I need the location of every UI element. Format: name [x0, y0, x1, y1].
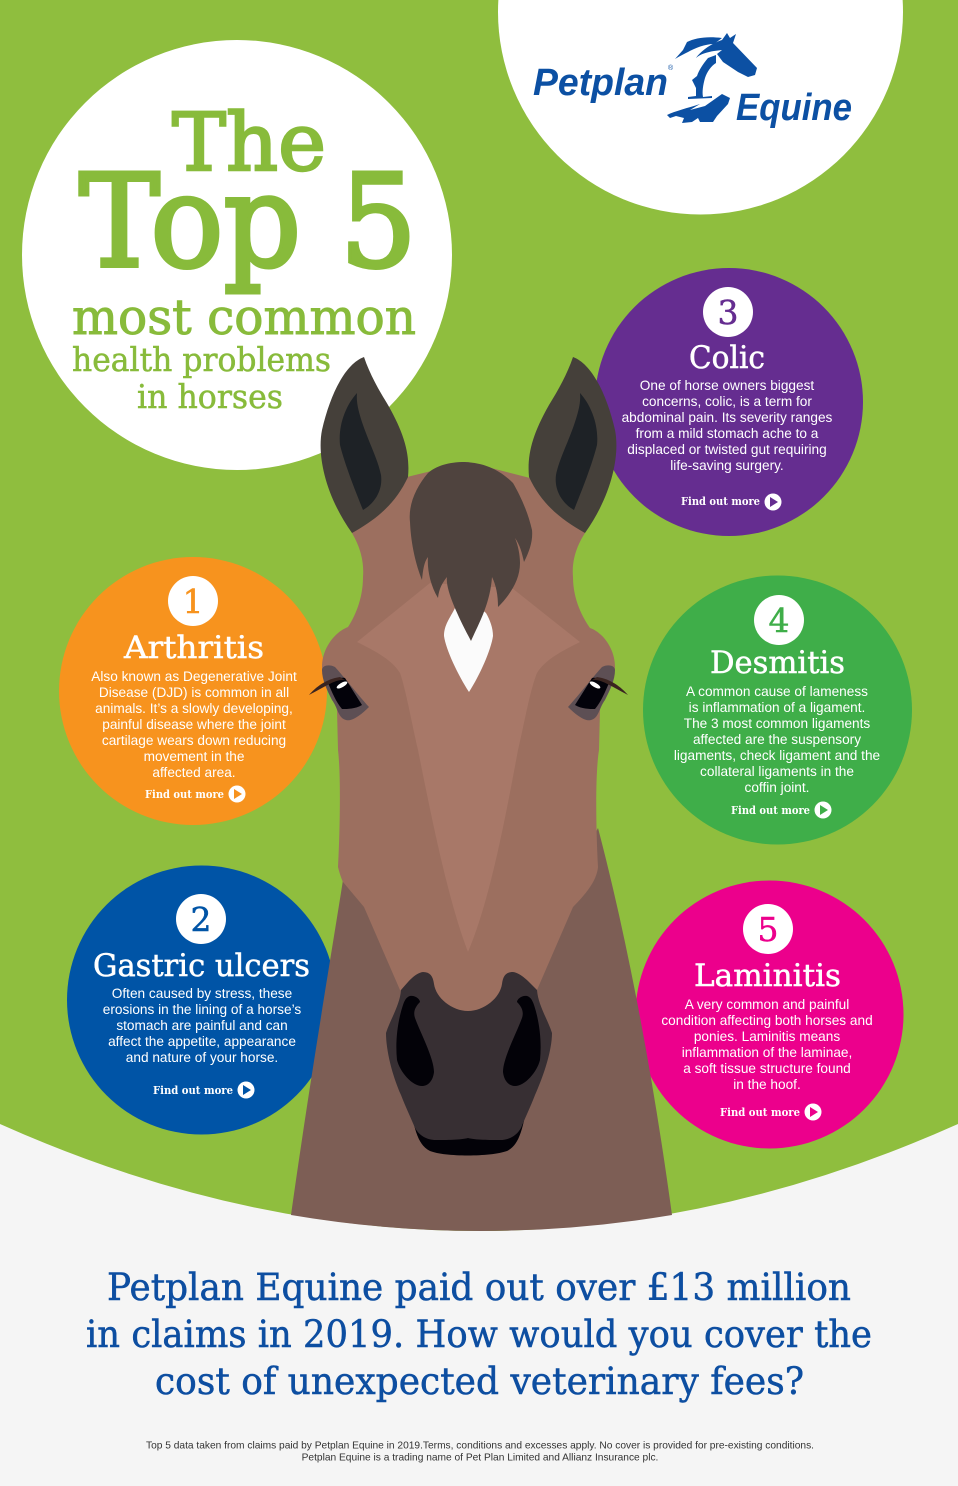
link: find out more: Find out more: [153, 1084, 233, 1097]
heading: Laminitis: Laminitis: [694, 958, 841, 994]
text: Laminitis description: a soft tissue structure found: [683, 1061, 851, 1076]
number badge 2: [176, 894, 226, 944]
text: Arthritis description: Also known as Degenerative Joint: [91, 669, 297, 684]
text: Gastric ulcers description: [103, 986, 301, 1065]
text: Laminitis description: A very common and painful: [685, 997, 849, 1012]
illustration: horse: [291, 357, 672, 1231]
right nostril: [503, 996, 541, 1086]
text: Desmitis description: affected are the suspensory: [693, 732, 861, 747]
text: Colic description: abdominal pain. Its severity ranges: [622, 410, 833, 425]
panel: 4 Desmitis: [643, 576, 912, 844]
text: Gastric ulcers description: Often caused by stress, these: [112, 986, 292, 1001]
link: find out more: [145, 786, 246, 802]
text: Desmitis description: collateral ligaments in the: [700, 764, 854, 779]
right eye: [568, 665, 628, 720]
number badge 5: [743, 904, 793, 954]
panel: title circle: [22, 40, 452, 470]
number badge 3: 3: [718, 293, 738, 332]
heading: Desmitis: Desmitis: [710, 645, 845, 681]
logo: Petplan Equine: [533, 33, 852, 129]
link: find out more: [731, 802, 832, 818]
text: Desmitis description: The 3 most common ligaments: [684, 716, 870, 731]
logo: Petplan Equine: Petplan: [533, 62, 668, 104]
text: Arthritis description: cartilage wears down reducing: [102, 733, 286, 748]
horse neck and chest: [291, 828, 672, 1231]
heading: Arthritis: Arthritis: [123, 630, 264, 666]
heading: Gastric ulcers: Gastric ulcers: [93, 948, 310, 984]
text: Arthritis description: animals. It’s a slowly developing,: [95, 701, 293, 716]
panel: 5 Laminitis: [636, 880, 904, 1148]
heading: The Top 5 most common health problems in horses: Top 5: [79, 148, 417, 297]
mouth: [412, 1116, 525, 1156]
link: find out more: Find out more: [145, 788, 224, 801]
text: Laminitis description: condition affecting both horses and: [661, 1013, 873, 1028]
link: find out more: [720, 1104, 822, 1120]
logo: Petplan Equine: ®: [668, 64, 674, 72]
text: Desmitis description: [674, 684, 880, 795]
text: Colic description: displaced or twisted gut requiring: [627, 442, 827, 457]
text: Desmitis description: ligaments, check ligament and the: [674, 748, 880, 763]
panel: 3 Colic: [595, 268, 863, 536]
number badge 3: [703, 287, 753, 337]
closing statement: Petplan Equine paid out over £13 million: [107, 1266, 851, 1309]
footnote: [146, 1440, 814, 1464]
muzzle: [386, 972, 552, 1140]
right ear: [529, 357, 616, 533]
footnote: Petplan Equine is a trading name of Pet Plan Limited and Allianz Insurance plc.: [302, 1452, 658, 1464]
heading: The Top 5 most common health problems in horses: [72, 96, 417, 416]
text: Colic description: from a mild stomach ache to a: [636, 426, 819, 441]
footnote: Top 5 data taken from claims paid by Petplan Equine in 2019.Terms, conditions and excesses apply. No cover is provided for pre-existing conditions.: [146, 1440, 814, 1452]
text: Desmitis description: A common cause of lameness: [686, 684, 868, 699]
link: find out more: [681, 494, 782, 510]
text: Laminitis description: in the hoof.: [733, 1077, 801, 1092]
text: Laminitis description: ponies. Laminitis means: [694, 1029, 840, 1044]
heading: The Top 5 most common health problems in horses: The: [172, 96, 326, 189]
heading: Colic: Colic: [689, 340, 765, 376]
number badge 2: 2: [190, 900, 212, 939]
closing statement: in claims in 2019. How would you cover the: [86, 1313, 872, 1356]
text: Colic description: One of horse owners biggest: [640, 378, 814, 393]
number badge 4: [754, 595, 804, 645]
link: find out more: Find out more: [720, 1106, 800, 1119]
number badge 5: 5: [758, 910, 778, 949]
left eye: [309, 665, 369, 720]
text: Gastric ulcers description: affect the appetite, appearance: [108, 1034, 296, 1049]
text: Gastric ulcers description: stomach are painful and can: [116, 1018, 288, 1033]
panel: 1 Arthritis: [59, 557, 327, 825]
text: Arthritis description: Disease (DJD) is common in all: [99, 685, 289, 700]
text: Arthritis description: [91, 669, 297, 780]
closing statement: cost of unexpected veterinary fees?: [155, 1360, 804, 1403]
heading: The Top 5 most common health problems in horses: in horses: [137, 377, 283, 416]
text: Desmitis description: coffin joint.: [745, 780, 809, 795]
number badge 1: 1: [182, 582, 204, 621]
text: Colic description: [622, 378, 833, 473]
text: Arthritis description: movement in the: [144, 749, 244, 764]
left ear: [321, 357, 408, 533]
number badge 1: [168, 576, 218, 626]
horse face highlight: [357, 583, 580, 952]
text: Colic description: concerns, colic, is a term for: [642, 394, 812, 409]
text: Arthritis description: painful disease where the joint: [102, 717, 286, 732]
text: Laminitis description: inflammation of the laminae,: [682, 1045, 852, 1060]
panel: logo circle: [498, 0, 903, 214]
left nostril: [396, 996, 434, 1086]
link: find out more: [153, 1082, 254, 1098]
link: find out more: Find out more: [731, 804, 810, 817]
text: Desmitis description: is inflammation of a ligament.: [689, 700, 865, 715]
horse head: [322, 462, 615, 1020]
panel: 2 Gastric ulcers: [67, 866, 336, 1134]
logo: Petplan Equine: Equine: [736, 87, 852, 129]
closing statement: [86, 1266, 872, 1403]
link: find out more: Find out more: [681, 495, 760, 508]
text: Gastric ulcers description: erosions in the lining of a horse’s: [103, 1002, 301, 1017]
text: Laminitis description: [661, 997, 873, 1092]
text: Arthritis description: affected area.: [152, 765, 236, 780]
white blaze: [444, 600, 493, 692]
heading: The Top 5 most common health problems in horses: health problems: [72, 340, 331, 379]
number badge 4: 4: [768, 601, 790, 640]
text: Gastric ulcers description: and nature of your horse.: [126, 1050, 278, 1065]
forelock: [410, 462, 532, 641]
heading: The Top 5 most common health problems in horses: most common: [72, 289, 416, 346]
text: Colic description: life-saving surgery.: [670, 458, 784, 473]
